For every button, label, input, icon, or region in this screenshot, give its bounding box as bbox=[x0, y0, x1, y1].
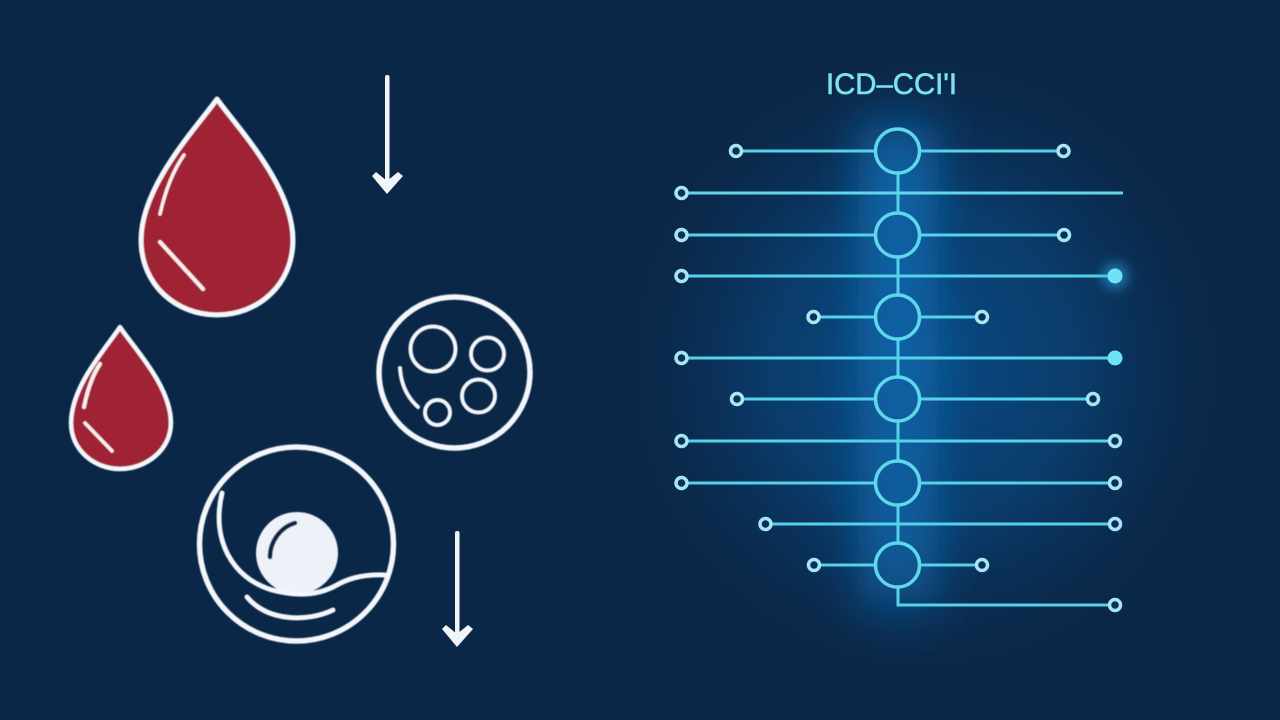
ball highlight bbox=[270, 523, 295, 557]
glowing terminals bbox=[1102, 263, 1128, 366]
curved membrane bbox=[219, 493, 385, 594]
arrow: top down arrow bbox=[372, 75, 403, 194]
icon: circle with round cell on curved surface bbox=[200, 447, 394, 641]
diagram: central spine with branches bbox=[676, 129, 1128, 610]
arrow: bottom down arrow bbox=[442, 531, 473, 647]
title: ICD–CCI'I bbox=[826, 68, 957, 101]
icon: large blood drop bbox=[141, 99, 293, 315]
cell ball bbox=[256, 512, 338, 594]
horizontal branches bbox=[687, 151, 1123, 565]
spine bbox=[898, 173, 1108, 605]
icon: small blood drop bbox=[71, 327, 171, 469]
icon: circle with four cells bbox=[379, 297, 530, 448]
small ring terminals bbox=[676, 146, 1120, 610]
lower arc bbox=[247, 597, 333, 618]
main nodes bbox=[876, 129, 920, 587]
